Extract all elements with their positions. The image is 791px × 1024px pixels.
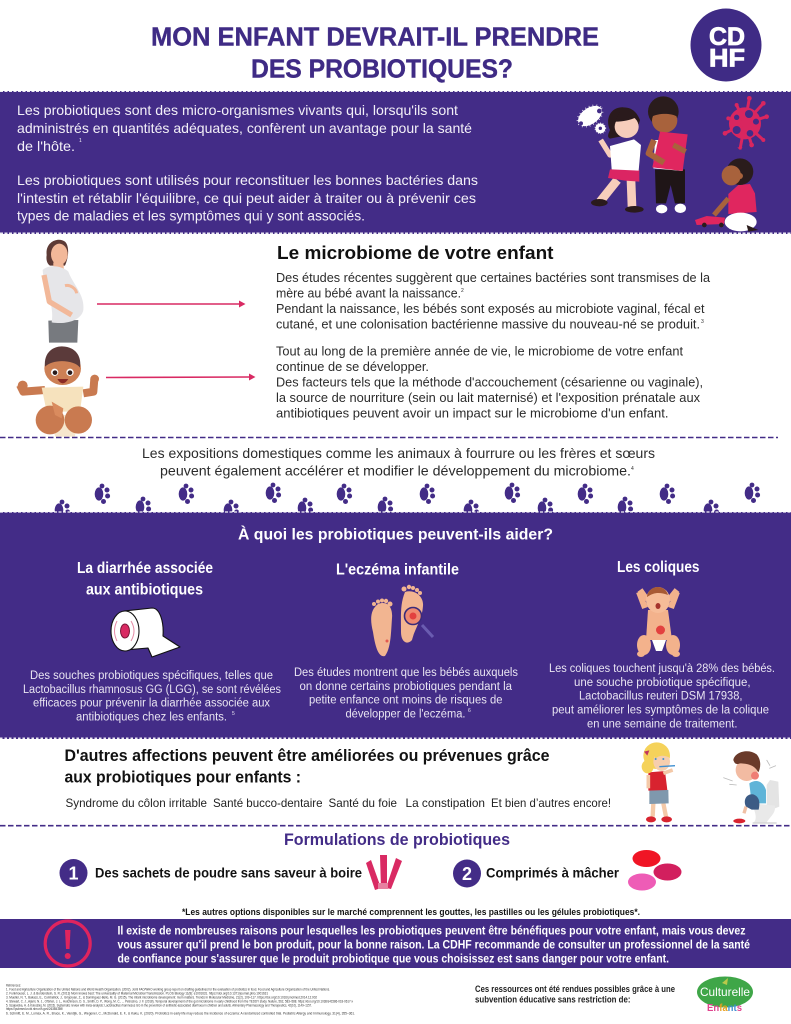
- column: infant eczema: Des études montrent que les bébés auxquels: [294, 667, 518, 679]
- column: antibiotic diarrhea: 5: [232, 711, 235, 717]
- column: colic: en une semaine de traitement.: [587, 718, 738, 730]
- text: microbiome paragraphs: Des études récentes suggèrent que certaines bactéries sont transmises de la: [276, 270, 711, 285]
- text: microbiome paragraphs: continue de se développer.: [276, 359, 429, 374]
- list: conditions: [66, 796, 611, 810]
- illustration: baby: [18, 346, 99, 437]
- title: [151, 22, 599, 84]
- text: household exposures: peuvent également accélérer et modifier le développement du microbiome.: [160, 462, 631, 478]
- illustration: boy on toilet: [723, 751, 779, 824]
- references: 3. Mueller, N. T., Bakacs, E., Combellick, J., Grigoryan, Z., & Dominguez-Bello, M. G. (2015). The infant microbiome development: mom matters. Trends in Molecular Medicine, 21(2), 109–117. https://doi.org/10.1016/j.molmed.2014.12.002: [6, 996, 317, 1000]
- text: definition of probiotics: l'intestin et rétablir l'équilibre, ce qui peut aider à traiter ou à prévenir ces: [17, 190, 476, 206]
- list: conditions: Et bien d’autres encore!: [491, 796, 611, 810]
- icon: tablets: [628, 850, 682, 890]
- text: microbiome paragraphs: la source de nourriture (sein ou lait maternisé) et l'exposition prénatale aux: [276, 390, 700, 405]
- list: conditions: La constipation: [406, 796, 485, 810]
- text: microbiome paragraphs: 2: [461, 288, 464, 294]
- logo: Culturelle Enfants: Enfants: [707, 1003, 742, 1014]
- column: antibiotic diarrhea: efficaces pour prévenir la diarrhée associée aux: [33, 698, 270, 710]
- icon: warning: [45, 921, 90, 966]
- column: infant eczema: développer de l'eczéma.: [346, 708, 466, 720]
- text: warning: vous assurer qu'il prend le bon produit, pour la bonne raison. La CDHF recommande de consulter un professionnel de la santé: [118, 940, 750, 952]
- icon: sachets: [366, 855, 402, 890]
- column: infant eczema: 6: [468, 708, 471, 714]
- footnote: other options: *Les autres options disponibles sur le marché comprennent les gouttes, les pastilles ou les gélules probiotiques*.: [182, 907, 640, 918]
- icon: toilet paper roll: [111, 608, 180, 657]
- logo: CDHF: CD: [709, 23, 745, 51]
- heading: formulations: Formulations de probiotiques: [284, 831, 510, 849]
- column: antibiotic diarrhea: Des souches probiotiques spécifiques, telles que: [30, 670, 273, 682]
- arrow: baby to text: [106, 374, 256, 380]
- text: household exposures: Les expositions domestiques comme les animaux à fourrure ou les frères et sœurs: [142, 445, 655, 461]
- logo: CDHF: [690, 8, 762, 82]
- references: 2. Funkhouser, L. J. & Bordenstein, S. R. (2013) Mom knows best: The universality of Maternal Microbial Transmission. PLOS Biology 11(8): e1001631. https://doi.org/10.1371/journal.pbio.1001631: [6, 992, 268, 996]
- column: infant eczema: L'eczéma infantile: [336, 562, 459, 578]
- column: colic: Lactobacillus reuteri DSM 17938,: [579, 690, 742, 702]
- list: conditions: Santé du foie: [328, 796, 397, 810]
- icon: virus: [723, 96, 769, 150]
- heading: other conditions: D'autres affections peuvent être améliorées ou prévenues grâce: [64, 747, 550, 765]
- references: [6, 984, 355, 1016]
- logo: Culturelle Enfants: [697, 976, 753, 1014]
- text: definition of probiotics: Les probiotiques sont des micro-organismes vivants qui, lorsqu'ils sont: [17, 102, 458, 118]
- references: 6. Schmitt, E. M., Lomax, A. R., Bruce, K., Vandijk, G., Wegener, C., McDonald, E. F., & Kaku, K. (2020). Probiotics in early life may reduce the incidence of eczema: A randomized controlled trial. Pediatric Allergy and Immunology, 31(4), 355–361.: [6, 1012, 355, 1016]
- arrow: mother to text: [97, 300, 246, 308]
- title: DES PROBIOTIQUES?: [251, 54, 513, 84]
- text: definition of probiotics: [17, 102, 478, 224]
- panel: formulations: [60, 831, 682, 918]
- panel: warning: [0, 919, 791, 968]
- item 2: chewable tablets: Comprimés à mâcher: [486, 864, 620, 880]
- panel: how probiotics help: [0, 512, 791, 739]
- panel: definition banner: [0, 91, 791, 234]
- column: infant eczema: petite enfance ont moins de risques de: [309, 694, 502, 706]
- illustration: children and germs: [574, 96, 758, 232]
- column: colic: une souche probiotique spécifique,: [574, 677, 750, 689]
- references: 5. Szajewska, H. & Kołodziej, M. (2015). Systematic review with meta-analysis: Lactobacillus rhamnosus GG in the prevention of antibiotic-associated diarrhoea in children and adults. Alimentary Pharmacology and Therapeutics, 42(10), 1149–1157.: [6, 1004, 312, 1008]
- logo: Culturelle Enfants: Culturelle: [700, 985, 750, 999]
- text: microbiome paragraphs: cutané, et une colonisation bactérienne massive du nouveau-né se produit.: [276, 316, 700, 332]
- text: microbiome paragraphs: Des facteurs tels que la méthode d'accouchement (césarienne ou vaginale),: [276, 374, 703, 390]
- illustration: girl brushing teeth: [642, 742, 675, 822]
- text: microbiome paragraphs: [276, 270, 711, 420]
- text: household exposures: [142, 445, 655, 478]
- column: colic: [549, 559, 775, 730]
- text: definition of probiotics: de l'hôte.: [17, 138, 75, 154]
- column: antibiotic diarrhea: Lactobacillus rhamnosus GG (LGG), se sont révélées: [23, 684, 281, 696]
- text: microbiome paragraphs: Tout au long de la première année de vie, le microbiome de votre enfant: [276, 344, 683, 358]
- title: MON ENFANT DEVRAIT-IL PRENDRE: [151, 22, 599, 52]
- references: Références:: [6, 984, 21, 988]
- text: microbiome paragraphs: mère au bébé avant la naissance.: [276, 286, 461, 300]
- text: warning: de confiance pour s'assurer que le produit probiotique que vous choisissez est sans danger pour votre enfant.: [118, 954, 669, 966]
- icon: crying baby with colic: [637, 587, 680, 657]
- text: definition of probiotics: Les probiotiques sont utilisés pour reconstituer les bonnes bactéries dans: [17, 172, 478, 188]
- credit: educational grant: Ces ressources ont été rendues possibles grâce à une: [475, 984, 675, 994]
- item 2: chewable tablets: 2: [462, 864, 472, 884]
- column: antibiotic diarrhea: aux antibiotiques: [86, 582, 203, 598]
- column: colic: Les coliques: [617, 559, 700, 576]
- column: colic: peut améliorer les symptômes de la colique: [552, 704, 769, 716]
- text: definition of probiotics: 1: [79, 138, 82, 144]
- references: 4. Stewart, C. J., Ajami, N. J., O'Brien, J. L., Hutchinson, D. S., Smith, D. P., Wong, M. C., ... Petrosino, J. F. (2018). Temporal development of the gut microbiome in early childhood from the TEDDY study. Nature, 562, 583–588. https://doi.org/10.1038/s41586-018-0617-x: [6, 1000, 353, 1004]
- list: conditions: Santé bucco-dentaire: [213, 796, 323, 810]
- column: antibiotic diarrhea: antibiotiques chez les enfants.: [76, 712, 227, 724]
- panel: other conditions: [64, 742, 779, 824]
- item 1: powder sachets: [60, 855, 402, 890]
- column: infant eczema: [294, 562, 518, 720]
- references: 1. Food and Agriculture Organization of the United Nations and World Health Organization. (2002). Joint FAO/WHO working group report on drafting guidelines for the evaluation of probiotics in food. Food and Agriculture Organization of the United Nations.: [6, 988, 330, 992]
- text: microbiome paragraphs: antibiotiques peuvent avoir un impact sur le microbiome d'un enfant.: [276, 406, 668, 420]
- credit: educational grant: subvention éducative sans restriction de:: [475, 994, 630, 1004]
- list: conditions: Syndrome du côlon irritable: [66, 796, 207, 810]
- item 2: chewable tablets: [453, 850, 682, 890]
- illustration: pregnant mother: [43, 240, 83, 343]
- text: warning: Il existe de nombreuses raisons pour lesquelles les probiotiques peuvent être bénéfiques pour votre enfant, mais vous devez: [118, 926, 746, 938]
- column: colic: Les coliques touchent jusqu'à 28% des bébés.: [549, 663, 775, 675]
- text: definition of probiotics: types de maladies et les symptômes qui y sont associés.: [17, 208, 365, 224]
- heading: microbiome: Le microbiome de votre enfant: [277, 242, 554, 263]
- text: microbiome paragraphs: 3: [701, 319, 704, 325]
- panel: microbiome: [18, 240, 711, 437]
- heading: other conditions: [64, 747, 550, 786]
- column: antibiotic diarrhea: [23, 560, 281, 724]
- heading: how probiotics help: À quoi les probiotiques peuvent-ils aider?: [238, 524, 553, 544]
- item 1: powder sachets: Des sachets de poudre sans saveur à boire: [95, 864, 362, 880]
- logo: CDHF: HF: [709, 44, 745, 72]
- text: household exposures: 4: [631, 466, 634, 472]
- text: definition of probiotics: administrés en quantités adéquates, confèrent un avantage pour la santé: [17, 120, 472, 136]
- heading: other conditions: aux probiotiques pour enfants :: [64, 768, 301, 786]
- icon: feet with eczema: [371, 585, 433, 656]
- paw prints: [55, 483, 760, 520]
- text: warning: [118, 926, 750, 966]
- text: microbiome paragraphs: Pendant la naissance, les bébés sont exposés au microbiote vaginal, fécal et: [276, 301, 705, 316]
- credit: educational grant: [475, 984, 675, 1004]
- column: antibiotic diarrhea: La diarrhée associée: [77, 560, 213, 577]
- column: infant eczema: on donne certains probiotiques pendant la: [300, 681, 513, 693]
- references: https://pubmed.ncbi.nlm.nih.gov/26365389/: [6, 1007, 63, 1011]
- item 1: powder sachets: 1: [68, 864, 79, 884]
